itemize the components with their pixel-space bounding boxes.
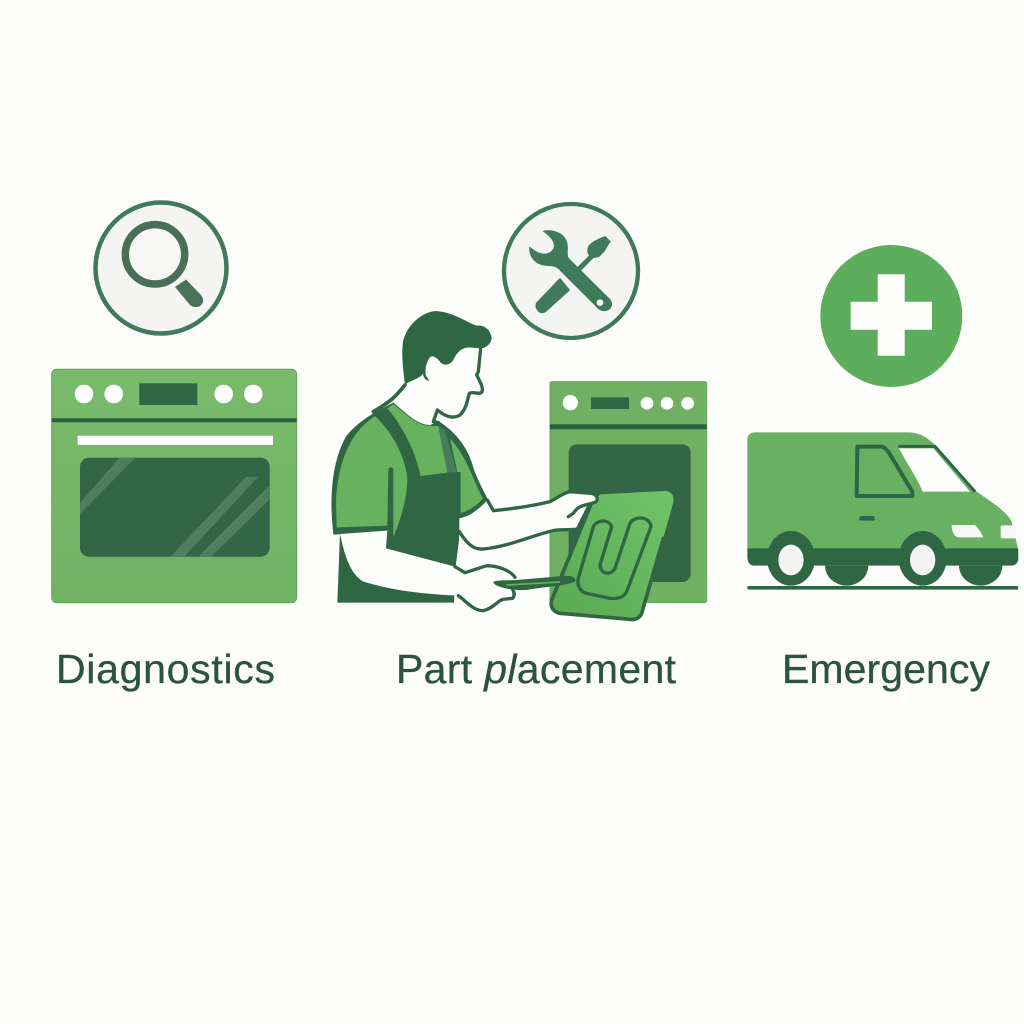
icon: medical cross badge [820,245,962,387]
label: diagnostics: Diagnostics [56,646,275,692]
hand tool [493,576,575,590]
technician figure [332,311,597,611]
illustration: emergency van [747,432,1018,590]
plate with paperclip [551,491,674,619]
panel: technician with oven [332,311,707,619]
label: part placement: Part placement [396,646,677,692]
oven behind technician [550,382,707,603]
icon: magnifying glass badge [96,202,226,334]
icon: tools badge [504,204,638,338]
panel: diagnostics oven [52,369,297,603]
label: emergency: Emergency [782,646,990,692]
